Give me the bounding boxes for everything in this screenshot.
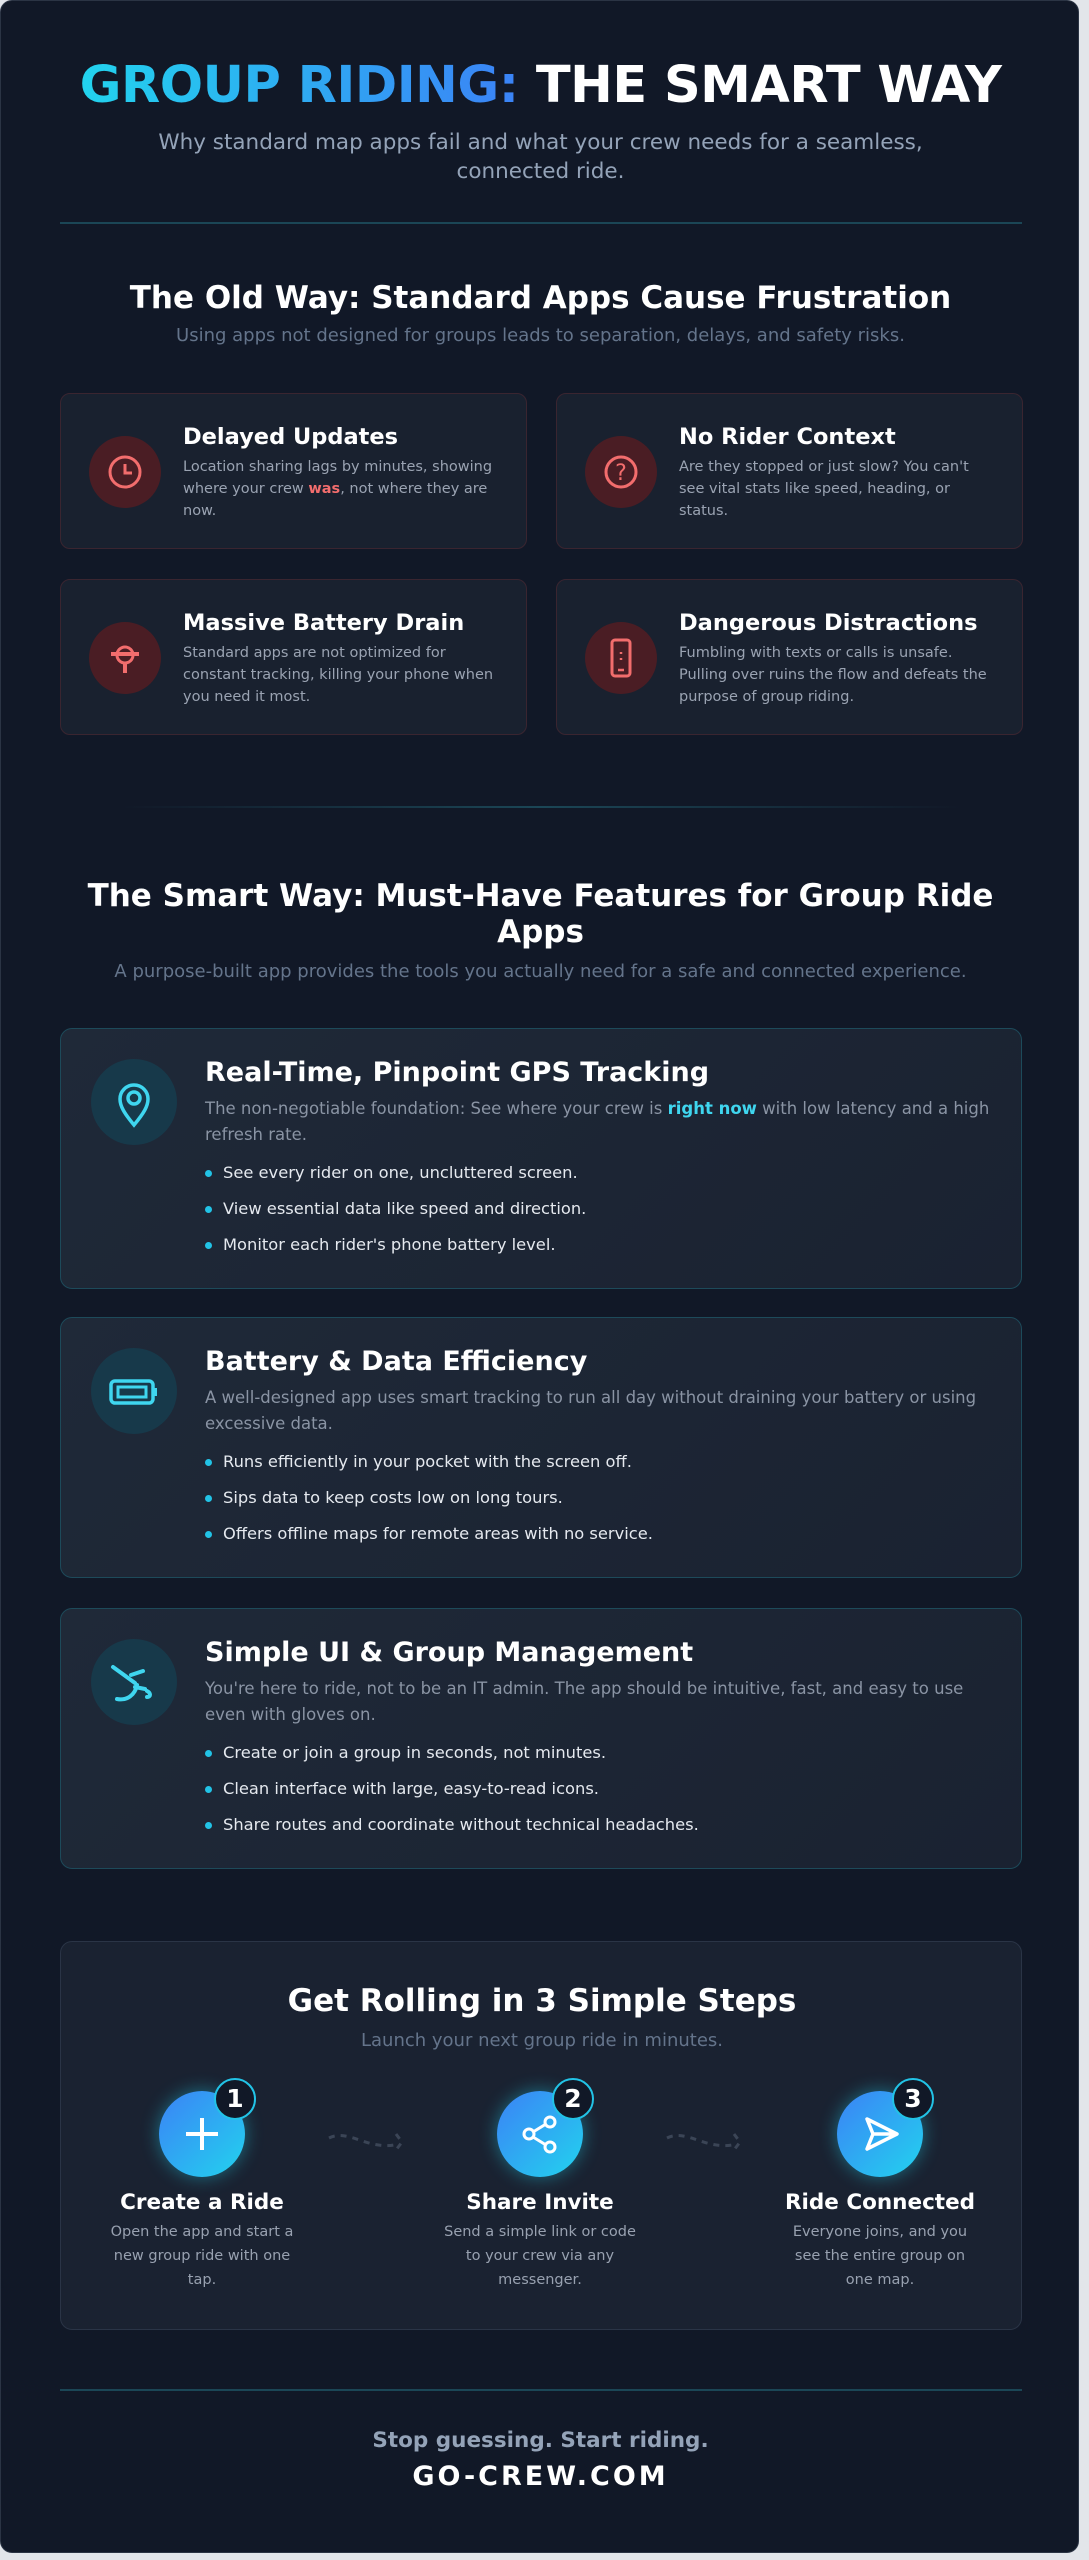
icon: drain	[89, 622, 161, 694]
text: Create a Ride	[120, 2190, 284, 2215]
icon: pin	[91, 1059, 177, 1145]
icon: phone	[585, 622, 657, 694]
panel: simple ui: Clean interface with large, easy-to-read icons.	[223, 1779, 599, 1798]
heading: steps: Get Rolling in 3 Simple Steps	[288, 1983, 796, 2019]
panel: distractions: Fumbling with texts or calls is unsafe. Pulling over ruins the flow and defeats the purpose of group riding.	[679, 645, 987, 705]
text: Send a simple link or code to your crew via any messenger.	[444, 2224, 636, 2288]
panel: delayed updates: Delayed Updates	[183, 424, 398, 450]
panel: simple ui: Simple UI & Group Management	[205, 1637, 693, 1668]
panel: battery efficiency: Sips data to keep costs low on long tours.	[223, 1488, 563, 1507]
arrow 1	[328, 2133, 402, 2149]
text: Open the app and start a new group ride with one tap.	[111, 2224, 293, 2288]
icon: question	[585, 436, 657, 508]
badge 1	[214, 2078, 256, 2120]
panel: simple ui: You're here to ride, not to be an IT admin. The app should be intuitive, fast, and easy to use even with gloves on.	[205, 1679, 963, 1724]
panel: no rider context: Are they stopped or just slow? You can't see vital stats like speed, heading, or status.	[679, 459, 969, 519]
panel: delayed updates: Location sharing lags by minutes, showing where your crew was, not where they are now.	[183, 459, 492, 519]
badge 2	[552, 2078, 594, 2120]
panel: no rider context	[556, 393, 1023, 549]
panel: gps tracking: Real-Time, Pinpoint GPS Tracking	[205, 1057, 709, 1088]
icon: share	[497, 2091, 583, 2177]
icon: send	[837, 2091, 923, 2177]
icon: clock	[89, 436, 161, 508]
panel: battery efficiency	[60, 1317, 1022, 1578]
panel: battery drain: Massive Battery Drain	[183, 610, 464, 636]
badge 1: 1	[226, 2084, 244, 2113]
text: Share Invite	[466, 2190, 614, 2215]
badge 2: 2	[564, 2084, 582, 2113]
subheading: old way: Using apps not designed for groups leads to separation, delays, and safety risks.	[176, 325, 905, 346]
panel: delayed updates	[60, 393, 527, 549]
panel: battery drain: Standard apps are not optimized for constant tracking, killing your phone when you need it most.	[183, 645, 493, 705]
badge 3: 3	[904, 2084, 922, 2113]
panel: gps tracking	[60, 1028, 1022, 1289]
step 2	[444, 2078, 636, 2288]
icon: plus	[159, 2091, 245, 2177]
heading: smart way: The Smart Way: Must-Have Features for Group Ride Apps	[88, 878, 993, 950]
footer url: GO-CREW.COM	[412, 2461, 669, 2492]
panel: gps tracking: View essential data like speed and direction.	[223, 1199, 586, 1218]
icon: battery	[91, 1348, 177, 1434]
heading: old way: The Old Way: Standard Apps Cause Frustration	[130, 280, 951, 316]
panel: battery efficiency: Runs efficiently in your pocket with the screen off.	[223, 1452, 632, 1471]
text: Ride Connected	[785, 2190, 975, 2215]
panel: battery efficiency: Battery & Data Efficiency	[205, 1346, 587, 1377]
subheading: steps: Launch your next group ride in minutes.	[361, 2030, 723, 2051]
panel: simple ui	[60, 1608, 1022, 1869]
panel: battery drain	[60, 579, 527, 735]
panel: no rider context: No Rider Context	[679, 424, 896, 450]
icon: glove	[91, 1639, 177, 1725]
panel: steps	[60, 1941, 1022, 2330]
panel: gps tracking: Monitor each rider's phone battery level.	[223, 1235, 556, 1254]
icon: question: ?	[615, 461, 627, 486]
panel: distractions: Dangerous Distractions	[679, 610, 978, 636]
panel: simple ui: Share routes and coordinate without technical headaches.	[223, 1815, 699, 1834]
panel: battery efficiency: Offers offline maps for remote areas with no service.	[223, 1524, 653, 1543]
title: GROUP RIDING: THE SMART WAY	[80, 56, 1001, 115]
panel: gps tracking: See every rider on one, uncluttered screen.	[223, 1163, 578, 1182]
footer tagline: Stop guessing. Start riding.	[372, 2428, 709, 2453]
panel: battery efficiency: A well-designed app uses smart tracking to run all day without draining your battery or using excessive data.	[205, 1388, 976, 1433]
badge 3	[892, 2078, 934, 2120]
panel: distractions	[556, 579, 1023, 735]
step 3	[785, 2078, 975, 2288]
subtitle: Why standard map apps fail and what your crew needs for a seamless, connected ride.	[158, 130, 923, 184]
panel: simple ui: Create or join a group in seconds, not minutes.	[223, 1743, 606, 1762]
subheading: smart way: A purpose-built app provides the tools you actually need for a safe and connected experience.	[114, 961, 967, 982]
arrow 2	[666, 2133, 740, 2149]
panel: gps tracking: The non-negotiable foundation: See where your crew is right now with low latency and a high refresh rate.	[205, 1099, 989, 1144]
step 1	[111, 2078, 293, 2288]
text: Everyone joins, and you see the entire group on one map.	[793, 2224, 967, 2288]
